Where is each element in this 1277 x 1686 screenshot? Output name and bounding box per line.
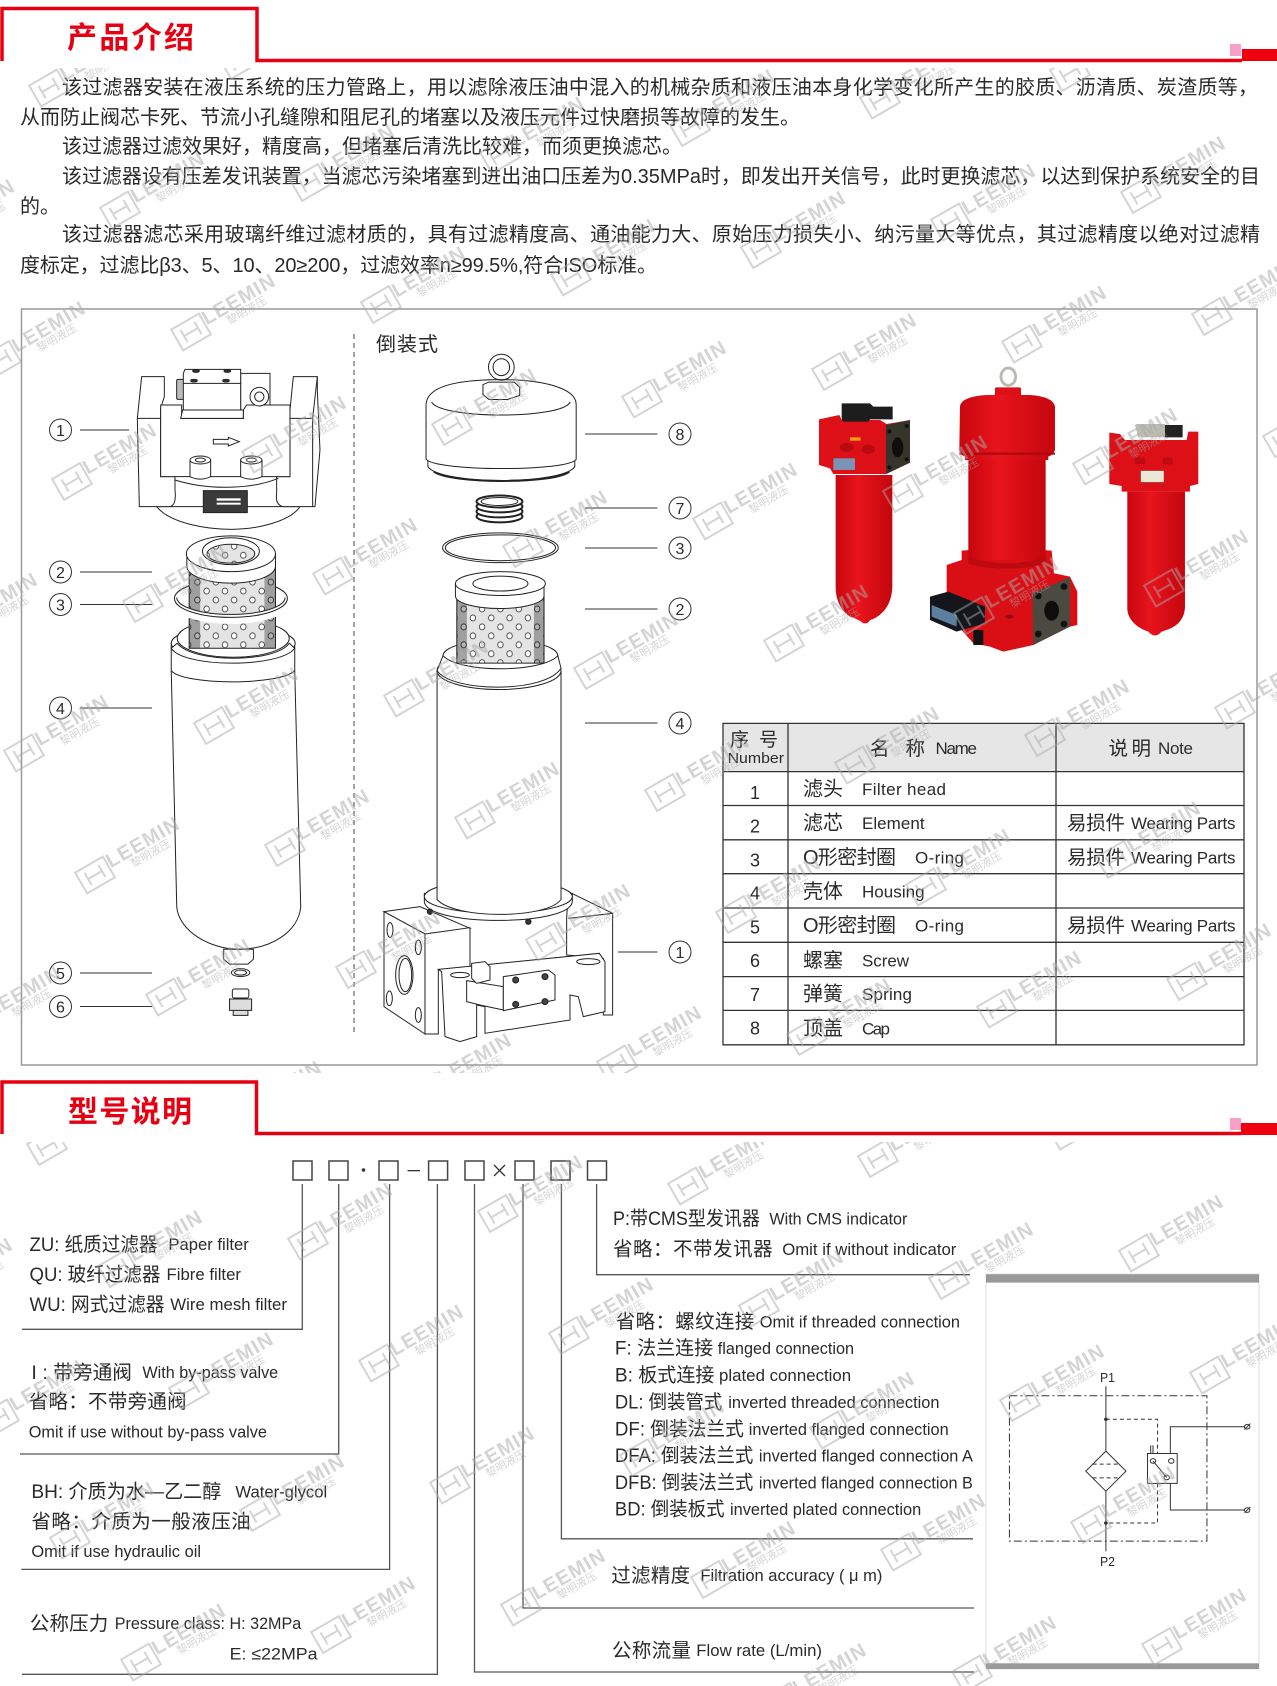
- text: 黎明液压: [483, 1446, 528, 1480]
- text: LEEMIN: [1100, 404, 1182, 464]
- text: LEEMIN: [958, 160, 1040, 220]
- text: 黎明液压: [982, 1242, 1027, 1276]
- text: 黎明液压: [437, 659, 482, 693]
- text: 黎明液压: [508, 781, 553, 815]
- text: 黎明液压: [364, 1596, 409, 1630]
- text: 黎明液压: [794, 211, 839, 245]
- text: LEEMIN: [221, 663, 303, 723]
- section header: model description: [2, 1082, 1277, 1135]
- text: LEEMIN: [695, 1124, 777, 1184]
- schematic symbol: [1009, 1386, 1250, 1551]
- text block: connection type codes: plated connection: [719, 1366, 851, 1385]
- text: 黎明液压: [389, 931, 434, 965]
- text: LEEMIN: [647, 1395, 729, 1455]
- text: LEEMIN: [317, 120, 399, 180]
- table header row: Note: [1158, 739, 1193, 758]
- text: LEEMIN: [1148, 132, 1230, 192]
- callouts: left diagram part numbers: 2: [56, 565, 65, 582]
- text block: connection type codes: inverted flanged connection A: [759, 1446, 974, 1466]
- table notes: 易损件: [1067, 812, 1125, 834]
- text: LEEMIN: [743, 852, 825, 912]
- text: LEEMIN: [576, 1273, 658, 1333]
- text block: connection type codes: DFA: 倒装法兰式: [615, 1445, 753, 1467]
- text: LEEMIN: [933, 825, 1015, 885]
- text: 黎明液压: [817, 604, 862, 638]
- text: LEEMIN: [127, 148, 209, 208]
- section header: product introduction: [2, 8, 1277, 61]
- text block: medium codes: Water-glycol: [235, 1482, 327, 1502]
- text: LEEMIN: [198, 270, 280, 330]
- text: 黎明液压: [1126, 427, 1171, 461]
- text: LEEMIN: [1169, 1584, 1251, 1644]
- text: LEEMIN: [1004, 947, 1086, 1007]
- inverted housing, element, ring, spring and cap: [426, 354, 576, 914]
- text block: medium codes: [31, 1481, 327, 1561]
- text: LEEMIN: [718, 1517, 800, 1577]
- text: LEEMIN: [79, 419, 161, 479]
- text block: filtration accuracy: 过滤精度: [611, 1565, 690, 1587]
- table part names: O-ring: [915, 848, 964, 868]
- text: LEEMIN: [649, 337, 731, 397]
- text: 黎明液压: [460, 1053, 505, 1087]
- text: LEEMIN: [528, 1545, 610, 1605]
- label: inverted type: 倒装式: [376, 333, 438, 356]
- text: LEEMIN: [386, 1301, 468, 1361]
- text: LEEMIN: [102, 813, 184, 873]
- text block: connection type codes: B: 板式连接: [615, 1364, 714, 1386]
- text: 黎明液压: [533, 116, 578, 150]
- table header row: 名 称: [870, 738, 925, 760]
- text: LEEMIN: [885, 1096, 967, 1156]
- text: 黎明液压: [1030, 970, 1075, 1004]
- text block: indicator codes: P:带CMS型发讯器: [613, 1208, 760, 1230]
- text block: pressure class: 公称压力: [30, 1613, 108, 1635]
- text: 黎明液压: [602, 1297, 647, 1331]
- table: parts list: [723, 723, 1244, 1045]
- text: 黎明液压: [769, 876, 814, 910]
- text block: flow rate: 公称流量: [612, 1640, 691, 1662]
- text: LEEMIN: [1075, 1069, 1157, 1129]
- text: 黎明液压: [721, 1147, 766, 1181]
- callouts: right diagram part numbers: [585, 423, 691, 963]
- callouts: right diagram part numbers: 3: [676, 541, 685, 558]
- text: 黎明液压: [414, 266, 459, 300]
- text: 黎明液压: [174, 1623, 219, 1657]
- text: 黎明液压: [80, 1108, 125, 1142]
- text: 黎明液压: [128, 836, 173, 870]
- callouts: right diagram part numbers: 8: [676, 427, 685, 444]
- text: 黎明液压: [57, 714, 102, 748]
- intro text block: 的。: [20, 195, 60, 218]
- text block: medium codes: Omit if use hydraulic oil: [31, 1542, 201, 1561]
- text: 黎明液压: [1197, 549, 1242, 583]
- text: LEEMIN: [956, 1218, 1038, 1278]
- text: 黎明液压: [199, 958, 244, 992]
- text: 黎明液压: [863, 1391, 908, 1425]
- text: 黎明液压: [675, 360, 720, 394]
- table header row: 说明: [1108, 738, 1151, 760]
- text: LEEMIN: [839, 309, 921, 369]
- text block: pressure class: E: ≤22MPa: [230, 1644, 318, 1664]
- table part names: 滤头: [803, 778, 843, 800]
- panel: hydraulic schematic: P1: [1100, 1370, 1115, 1385]
- text: LEEMIN: [507, 93, 589, 153]
- text: LEEMIN: [1194, 919, 1276, 979]
- table row numbers: [750, 783, 760, 1038]
- text: 黎明液压: [554, 1568, 599, 1602]
- text: 黎明液压: [151, 1230, 196, 1264]
- text: 黎明液压: [1195, 1608, 1240, 1642]
- table part names: [803, 778, 964, 1040]
- text: 黎明液压: [153, 171, 198, 205]
- text block: connection type codes: inverted threaded connection: [728, 1393, 940, 1412]
- text: LEEMIN: [1027, 1340, 1109, 1400]
- text: LEEMIN: [1052, 675, 1134, 735]
- text: 黎明液压: [1149, 821, 1194, 855]
- text block: filter media codes: [30, 1234, 287, 1316]
- text: 黎明液压: [32, 1379, 77, 1413]
- text: 黎明液压: [366, 537, 411, 571]
- table header row: Number: [728, 750, 784, 767]
- text: 黎明液压: [531, 1175, 576, 1209]
- text: 黎明液压: [698, 754, 743, 788]
- text: 黎明液压: [1007, 577, 1052, 611]
- text: LEEMIN: [315, 1179, 397, 1239]
- text block: filtration accuracy: [611, 1565, 882, 1587]
- text block: connection type codes: [615, 1311, 974, 1520]
- intro text block: 该过滤器安装在液压系统的压力管路上，用以滤除液压油中混入的机械杂质和液压油本身化学变化所产生的胶质、沥清质、炭渣质等，: [62, 76, 1258, 99]
- intro text block: 该过滤器滤芯采用玻璃纤维过滤材质的，具有过滤精度高、通油能力大、原始压力损失小、纳污量大等优点，其过滤精度以绝对过滤精: [62, 223, 1260, 246]
- text: 黎明液压: [959, 848, 1004, 882]
- text block: indicator codes: 省略：不带发讯器: [613, 1238, 773, 1260]
- text: LEEMIN: [1077, 10, 1159, 70]
- callouts: right diagram part numbers: 2: [676, 602, 685, 619]
- text: 黎明液压: [1005, 1635, 1050, 1669]
- text: 黎明液压: [485, 388, 530, 422]
- text: 黎明液压: [9, 986, 54, 1020]
- text: LEEMIN: [8, 297, 90, 357]
- text: 黎明液压: [1172, 1214, 1217, 1248]
- text: LEEMIN: [411, 636, 493, 696]
- text block: connection type codes: flanged connection: [718, 1339, 854, 1358]
- text: 黎明液压: [723, 89, 768, 123]
- text: LEEMIN: [979, 1612, 1061, 1672]
- text block: indicator codes: Omit if without indicator: [782, 1240, 957, 1259]
- text: 黎明液压: [82, 49, 127, 83]
- text: 黎明液压: [222, 1352, 267, 1386]
- text: LEEMIN: [246, 0, 328, 58]
- text: LEEMIN: [54, 1084, 136, 1144]
- callouts: left diagram part numbers: 3: [56, 598, 65, 614]
- text: 黎明液压: [840, 998, 885, 1032]
- diagram: standard filter exploded view: [137, 369, 320, 1015]
- text: 黎明液压: [865, 333, 910, 367]
- leader lines from code boxes: [20, 1184, 974, 1674]
- filter head: [137, 369, 320, 529]
- text block: by-pass valve codes: With by-pass valve: [142, 1363, 278, 1382]
- model code boxes: [293, 1161, 606, 1180]
- callouts: left diagram part numbers: 1: [56, 423, 65, 440]
- text block: filter media codes: ZU: 纸质过滤器: [30, 1234, 158, 1256]
- text: 黎明液压: [934, 1513, 979, 1547]
- text block: connection type codes: inverted flanged connection: [749, 1420, 949, 1439]
- table notes: Wearing Parts: [1131, 814, 1236, 833]
- text block: filter media codes: Paper filter: [168, 1235, 249, 1254]
- text: 黎明液压: [1220, 943, 1265, 977]
- text: LEEMIN: [434, 1029, 516, 1089]
- text block: indicator codes: [613, 1208, 957, 1260]
- table header row: Name: [936, 739, 977, 758]
- text: 黎明液压: [579, 903, 624, 937]
- table part names: O形密封圈: [803, 914, 896, 937]
- text block: filter media codes: Wire mesh filter: [170, 1295, 287, 1314]
- text: LEEMIN: [363, 907, 445, 967]
- table part names: Element: [862, 814, 925, 833]
- text: 黎明液压: [272, 22, 317, 56]
- text: 黎明液压: [34, 321, 79, 355]
- text: LEEMIN: [1029, 282, 1111, 342]
- text: 黎明液压: [984, 183, 1029, 217]
- text: 黎明液压: [888, 726, 933, 760]
- table part names: Filter head: [862, 780, 946, 799]
- text: LEEMIN: [457, 1423, 539, 1483]
- callouts: left diagram part numbers: [50, 419, 152, 1018]
- text: 黎明液压: [1053, 1364, 1098, 1398]
- table row numbers: 1: [750, 783, 760, 803]
- text block: filter media codes: Fibre filter: [166, 1265, 241, 1284]
- text: 黎明液压: [176, 565, 221, 599]
- table notes: Wearing Parts: [1131, 848, 1236, 868]
- text: LEEMIN: [601, 608, 683, 668]
- table part names: O形密封圈: [803, 846, 896, 869]
- table notes: [1067, 812, 1236, 937]
- text block: connection type codes: DF: 倒装法兰式: [615, 1418, 744, 1440]
- text: 黎明液压: [913, 61, 958, 95]
- table part names: 顶盖: [803, 1017, 843, 1040]
- text: LEEMIN: [340, 514, 422, 574]
- text: LEEMIN: [530, 486, 612, 546]
- text: LEEMIN: [292, 785, 374, 845]
- text: 黎明液压: [103, 1501, 148, 1535]
- text block: by-pass valve codes: Omit if use without by-pass valve: [29, 1422, 267, 1442]
- text: 黎明液压: [412, 1324, 457, 1358]
- callouts: left diagram part numbers: 5: [56, 966, 65, 983]
- table part names: O-ring: [915, 916, 964, 936]
- callouts: right diagram part numbers: 7: [676, 501, 685, 518]
- product photos: three red filters: [819, 368, 1198, 652]
- table part names: Cap: [862, 1020, 890, 1038]
- text: LEEMIN: [269, 392, 351, 452]
- table row numbers: 3: [750, 850, 760, 870]
- text: 黎明液压: [1124, 1486, 1169, 1520]
- text: LEEMIN: [1171, 526, 1253, 586]
- text block: medium codes: BH: 介质为水—乙二醇: [31, 1481, 221, 1503]
- text: LEEMIN: [1098, 1462, 1180, 1522]
- text: 黎明液压: [746, 482, 791, 516]
- table header row: [728, 729, 1193, 767]
- text: LEEMIN: [1123, 797, 1205, 857]
- product: right filter: [1109, 424, 1198, 635]
- text: LEEMIN: [244, 1057, 326, 1117]
- text: 黎明液压: [247, 687, 292, 721]
- table row numbers: 5: [750, 918, 760, 938]
- text: LEEMIN: [887, 38, 969, 98]
- product: left filter: [819, 403, 910, 623]
- text: LEEMIN: [148, 1600, 230, 1660]
- text block: connection type codes: DFB: 倒装法兰式: [615, 1472, 753, 1494]
- text: LEEMIN: [31, 691, 113, 751]
- text: LEEMIN: [768, 187, 850, 247]
- table part names: Screw: [862, 952, 910, 970]
- callouts: right diagram part numbers: 1: [676, 945, 685, 962]
- text block: connection type codes: F: 法兰连接: [615, 1338, 713, 1360]
- text: LEEMIN: [6, 1356, 88, 1416]
- text block: pressure class: Pressure class: H: 32MPa: [115, 1614, 302, 1633]
- text: LEEMIN: [766, 1246, 848, 1306]
- text block: connection type codes: inverted flanged connection B: [759, 1474, 973, 1492]
- text: LEEMIN: [578, 215, 660, 275]
- element and housing: [171, 536, 301, 1015]
- text: 黎明液压: [224, 293, 269, 327]
- text: LEEMIN: [388, 242, 470, 302]
- text: 黎明液压: [556, 510, 601, 544]
- text block: connection type codes: 省略：螺纹连接: [616, 1311, 754, 1333]
- text: LEEMIN: [267, 1450, 349, 1510]
- table row numbers: 7: [750, 985, 760, 1005]
- text block: by-pass valve codes: [29, 1362, 278, 1442]
- panel: structure diagrams and parts table: [22, 309, 1257, 1065]
- table row numbers: 4: [750, 884, 760, 904]
- table notes: 易损件: [1067, 847, 1125, 869]
- text block: filter media codes: QU: 玻纤过滤器: [30, 1264, 160, 1286]
- text: LEEMIN: [196, 1328, 278, 1388]
- text block: flow rate: Flow rate (L/min): [696, 1641, 822, 1660]
- text block: pressure class: [30, 1613, 318, 1664]
- text: LEEMIN: [697, 65, 779, 125]
- text: 黎明液压: [911, 1120, 956, 1154]
- text block: filtration accuracy: Filtration accuracy ( μ m): [700, 1566, 882, 1585]
- intro text block: 该过滤器过滤效果好，精度高，但堵塞后清洗比较难，而须更换滤芯。: [62, 135, 682, 158]
- table header row: 序 号: [730, 729, 778, 751]
- table row numbers: 8: [750, 1018, 760, 1038]
- inverted filter base: [384, 880, 613, 1042]
- text: LEEMIN: [77, 1478, 159, 1538]
- text: LEEMIN: [624, 1002, 706, 1062]
- text: 黎明液压: [627, 632, 672, 666]
- text: 黎明液压: [1103, 34, 1148, 68]
- text: 黎明液压: [295, 415, 340, 449]
- text: 黎明液压: [744, 1541, 789, 1575]
- text: 黎明液压: [343, 144, 388, 178]
- callouts: left diagram part numbers: 6: [56, 1000, 65, 1016]
- text: LEEMIN: [553, 880, 635, 940]
- text: 黎明液压: [650, 1025, 695, 1059]
- text: LEEMIN: [672, 730, 754, 790]
- text: 黎明液压: [936, 455, 981, 489]
- text block: connection type codes: DL: 倒装管式: [615, 1392, 722, 1414]
- table notes: 易损件: [1067, 915, 1125, 937]
- table part names: 滤芯: [803, 812, 843, 834]
- table row numbers: 6: [750, 951, 760, 971]
- diagram: inverted filter exploded view: [384, 354, 613, 1042]
- text: 黎明液压: [604, 238, 649, 272]
- text: LEEMIN: [505, 1151, 587, 1211]
- text block: connection type codes: Omit if threaded connection: [760, 1312, 960, 1332]
- text: 黎明液压: [792, 1269, 837, 1303]
- text block: connection type codes: BD: 倒装板式: [615, 1498, 725, 1520]
- text: LEEMIN: [56, 26, 138, 86]
- text: LEEMIN: [908, 1490, 990, 1550]
- text block: medium codes: 省略：介质为一般液压油: [31, 1511, 251, 1533]
- text: 黎明液压: [673, 1419, 718, 1453]
- table notes: Wearing Parts: [1131, 916, 1236, 936]
- text: 黎明液压: [1174, 156, 1219, 190]
- table part names: 螺塞: [803, 949, 843, 972]
- text: LEEMIN: [459, 364, 541, 424]
- table part names: Housing: [862, 882, 925, 902]
- table part names: Spring: [862, 985, 912, 1004]
- text: LEEMIN: [338, 1572, 420, 1632]
- text block: connection type codes: inverted plated connection: [730, 1500, 921, 1519]
- text: LEEMIN: [791, 581, 873, 641]
- table part names: 壳体: [803, 880, 843, 903]
- text: LEEMIN: [837, 1368, 919, 1428]
- text: LEEMIN: [862, 703, 944, 763]
- text: LEEMIN: [910, 431, 992, 491]
- section header: product introduction: 产品介绍: [67, 22, 194, 55]
- text block: indicator codes: With CMS indicator: [769, 1210, 908, 1228]
- text: LEEMIN: [814, 974, 896, 1034]
- text: 黎明液压: [293, 1474, 338, 1508]
- text: 黎明液压: [1078, 699, 1123, 733]
- text: LEEMIN: [720, 459, 802, 519]
- table row numbers: 2: [750, 816, 760, 836]
- text block: by-pass valve codes: 省略：不带旁通阀: [29, 1391, 187, 1413]
- callouts: right diagram part numbers: 4: [676, 716, 685, 733]
- text: LEEMIN: [173, 935, 255, 995]
- intro text block: 从而防止阀芯卡死、节流小孔缝隙和阻尼孔的堵塞以及液压元件过快磨损等故障的发生。: [20, 106, 800, 129]
- text: LEEMIN: [482, 758, 564, 818]
- intro text block: 该过滤器设有压差发讯装置，当滤芯污染堵塞到进出油口压差为0.35MPa时，即发出开关信号，此时更换滤芯，以达到保护系统安全的目: [62, 165, 1260, 188]
- product: center inverted filter: [930, 368, 1077, 652]
- text: LEEMIN: [125, 1206, 207, 1266]
- callouts: left diagram part numbers: 4: [56, 701, 65, 718]
- text: 黎明液压: [105, 443, 150, 477]
- section header: model description: 型号说明: [68, 1096, 192, 1129]
- text: 黎明液压: [270, 1080, 315, 1114]
- text: LEEMIN: [150, 541, 232, 601]
- text: LEEMIN: [981, 553, 1063, 613]
- text block: filter media codes: WU: 网式过滤器: [30, 1294, 164, 1316]
- table part names: 弹簧: [803, 982, 843, 1006]
- panel: hydraulic schematic: P2: [1100, 1554, 1115, 1569]
- text: LEEMIN: [1146, 1191, 1228, 1251]
- text: 黎明液压: [1055, 305, 1100, 339]
- intro text block: [20, 76, 1260, 277]
- intro text block: 度标定，过滤比β3、5、10、20≥200，过滤效率n≥99.5%,符合ISO标准。: [20, 254, 657, 277]
- text block: by-pass valve codes: I : 带旁通阀: [31, 1362, 132, 1384]
- text: 黎明液压: [1101, 1092, 1146, 1126]
- text: 黎明液压: [318, 809, 363, 843]
- panel: hydraulic schematic: [986, 1274, 1259, 1669]
- text block: flow rate: [612, 1640, 822, 1662]
- text: 黎明液压: [341, 1202, 386, 1236]
